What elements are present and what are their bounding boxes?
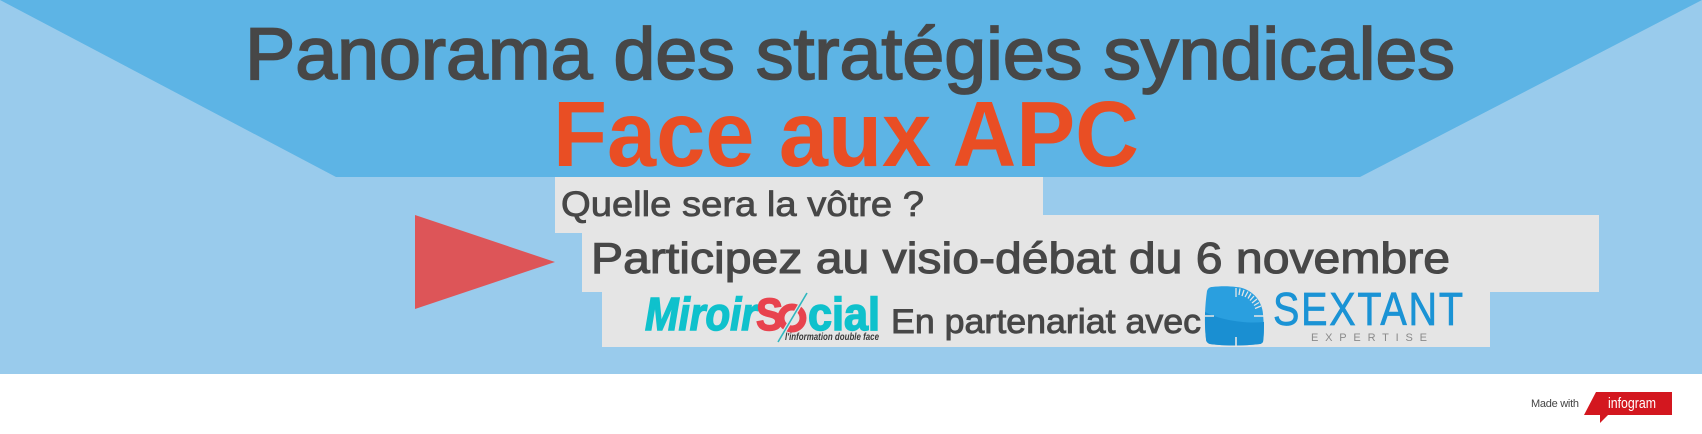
logo: Miroir Social: Miroir [645,288,759,340]
title: Panorama des stratégies syndicales [245,14,1455,95]
logo: infogram: infogram [1608,396,1656,412]
dark blue header shape [0,0,1702,177]
footer credit [1531,392,1672,423]
logo: Miroir Social: l'information double face [785,332,879,343]
arrow: red triangle [415,215,555,309]
question text: Quelle sera la vôtre ? [561,185,924,224]
logo: Miroir Social: cial [808,288,880,340]
subtitle: Face aux APC [553,82,1139,186]
logo: Miroir Social: S [756,289,783,340]
logo: Miroir Social [645,288,880,343]
panel: question [555,177,1043,233]
panel: call to action [582,215,1599,292]
logo: Sextant Expertise: SEXTANT [1273,284,1463,336]
logo: Sextant Expertise [1205,284,1463,346]
footer credit: Made with [1531,398,1579,410]
panel: partners [602,284,1490,347]
logo: infogram [1584,392,1672,423]
logo: Sextant Expertise: EXPERTISE [1311,332,1427,344]
icon: gauge [1205,286,1264,346]
partner text: En partenariat avec [891,303,1201,341]
call to action text: Participez au visio-débat du 6 novembre [591,234,1450,283]
